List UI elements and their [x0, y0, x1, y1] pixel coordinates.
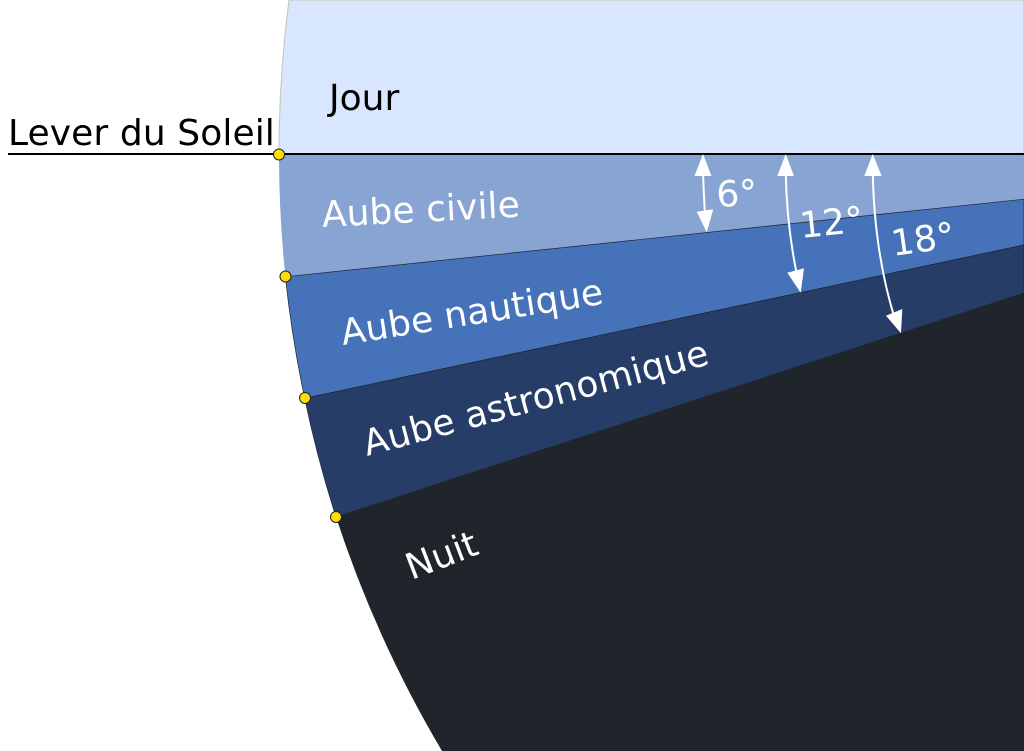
panel: night sector: [336, 293, 1024, 751]
label: astronomical dawn: Aube astronomique: [359, 333, 713, 465]
marker: nautical dawn: [300, 392, 310, 404]
arrow: 6 degrees: [694, 154, 713, 232]
panel: day sector: [279, 0, 1024, 154]
marker: sunrise: [274, 149, 284, 160]
label: day: Jour: [327, 78, 399, 119]
arrow: 18 degrees: [864, 154, 902, 333]
label: night: Nuit: [400, 524, 484, 588]
arrow: 12 degrees: [777, 154, 804, 293]
label: 6 degrees: 6°: [715, 173, 758, 216]
horizon line: [8, 153, 1024, 155]
marker: astronomical dawn: [330, 512, 342, 522]
label: 12 degrees: 12°: [798, 200, 865, 247]
panel: civil dawn band: [279, 154, 1024, 277]
label: nautical dawn: Aube nautique: [338, 272, 606, 354]
heading: sunrise label: Lever du Soleil: [8, 113, 275, 154]
label: 18 degrees: 18°: [889, 215, 957, 265]
panel: nautical dawn band: [285, 199, 1024, 398]
marker: civil dawn: [280, 271, 291, 282]
label: civil dawn: Aube civile: [321, 185, 521, 236]
panel: astronomical dawn band: [305, 245, 1024, 517]
